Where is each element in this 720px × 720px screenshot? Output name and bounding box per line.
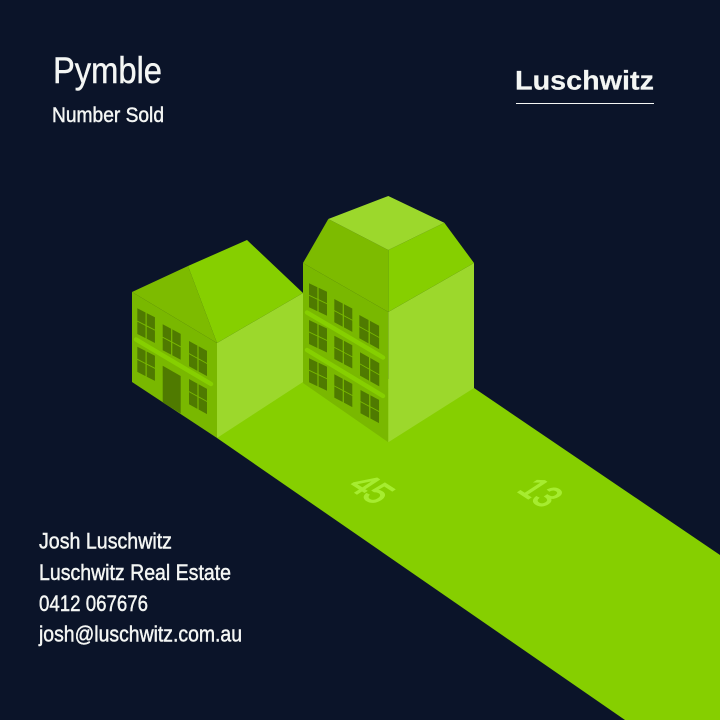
contact details: 0412 067676 xyxy=(39,591,148,616)
logo: Luschwitz xyxy=(515,66,654,96)
contact details: Josh Luschwitz xyxy=(39,528,172,554)
title: Pymble xyxy=(53,50,162,91)
contact details: josh@luschwitz.com.au xyxy=(38,622,242,646)
ground bar xyxy=(217,370,720,720)
contact details xyxy=(38,528,242,646)
icon: tall building xyxy=(303,196,474,442)
contact details: Luschwitz Real Estate xyxy=(39,560,231,585)
value label: 45: 45 xyxy=(339,468,403,510)
value label: 13: 13 xyxy=(508,472,572,514)
icon: small house xyxy=(132,240,303,438)
subtitle: Number Sold xyxy=(52,104,164,127)
